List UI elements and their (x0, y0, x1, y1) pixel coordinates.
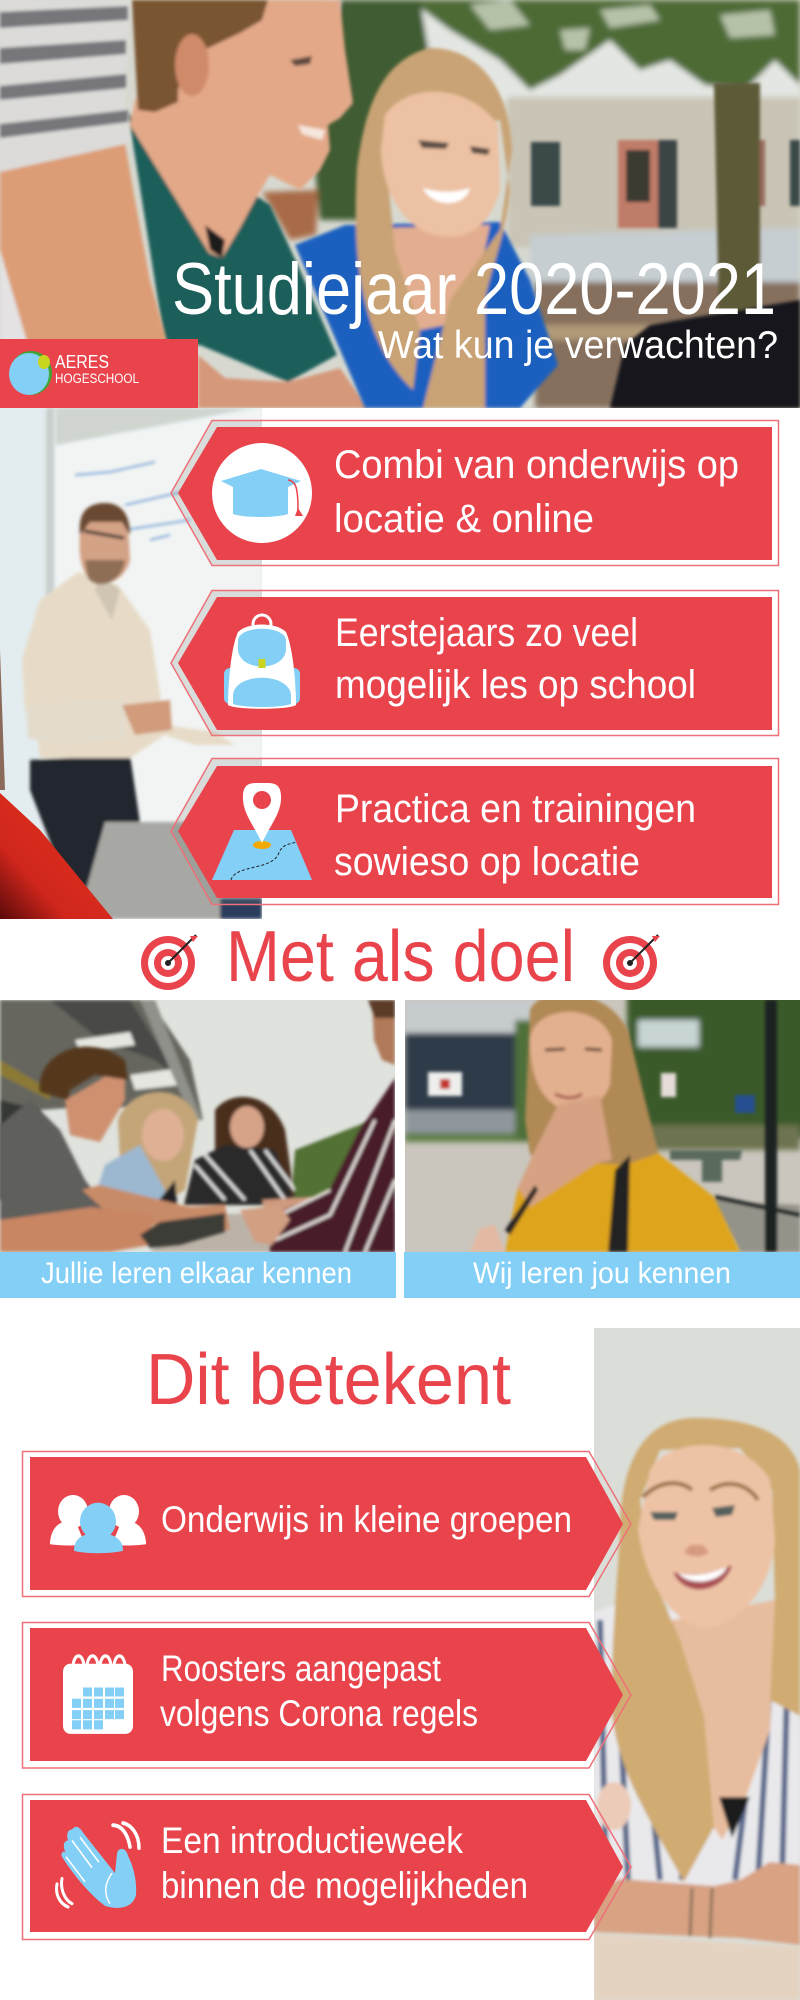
photo: group of students at table (0, 1000, 395, 1252)
callout 3: practica (171, 758, 779, 905)
caption bar right (404, 1252, 800, 1298)
table and shirt (594, 1934, 800, 2000)
callout 6: introductieweek (22, 1794, 631, 1940)
text: binnen de mogelijkheden: binnen de mogelijkheden (161, 1865, 528, 1906)
icon: target left (141, 935, 198, 990)
face (638, 1445, 775, 1627)
text: practica: Practica en trainingen (335, 787, 696, 831)
icon: calendar (63, 1656, 133, 1734)
caption bar right: Wij leren jou kennen (473, 1257, 731, 1290)
icon: waving hand (57, 1823, 139, 1908)
text: sowieso: sowieso op locatie (334, 840, 640, 884)
icon: target right (603, 935, 660, 990)
logo banner: Aeres Hogeschool (0, 339, 198, 408)
text: locatie en online: locatie & online (334, 497, 594, 541)
text: corona: volgens Corona regels (160, 1693, 478, 1734)
text: mogelijk les: mogelijk les op school (335, 663, 696, 707)
icon: backpack (224, 615, 300, 709)
left person striped top and arm (0, 0, 168, 345)
text: roosters: Roosters aangepast (161, 1648, 442, 1689)
blond woman (118, 1092, 198, 1210)
icon: map with pin (212, 783, 312, 880)
text: combi: Combi van onderwijs op (334, 443, 739, 487)
callout 1: combi onderwijs (171, 420, 779, 566)
subtitle: Wat kun je verwachten? (378, 324, 778, 367)
arm and hand (594, 1862, 800, 1945)
caption bar left: Jullie leren elkaar kennen (41, 1257, 352, 1290)
text: kleine groepen: Onderwijs in kleine groepen (161, 1499, 572, 1540)
callout 2: eerstejaars (171, 590, 779, 736)
man in polo (0, 1106, 104, 1222)
photo: smiling student (594, 1328, 800, 2000)
heading: Dit betekent: Dit betekent (146, 1340, 511, 1420)
logo banner: Aeres Hogeschool: AERES (55, 352, 109, 372)
text: introductieweek: Een introductieweek (161, 1820, 463, 1861)
right person stripes (270, 1078, 395, 1252)
hero photo: students at table (0, 0, 800, 408)
woman in blue shirt (295, 48, 558, 408)
callout 4: kleine groepen (22, 1452, 631, 1596)
caption bar left (0, 1252, 396, 1298)
man teal shirt (128, 0, 368, 408)
teacher photo (0, 408, 262, 919)
icon: graduation cap (212, 443, 312, 543)
heading: Met als doel: Met als doel (226, 917, 575, 997)
hair (612, 1418, 800, 1882)
woman right striped (215, 1097, 295, 1200)
icon: group of people (50, 1495, 146, 1553)
callout 5: roosters (22, 1622, 631, 1768)
logo banner: Aeres Hogeschool: HOGESCHOOL (55, 371, 139, 386)
pouch (140, 1213, 225, 1248)
text: eerstejaars: Eerstejaars zo veel (335, 611, 638, 655)
photo: girl in yellow sweater (405, 990, 800, 1252)
